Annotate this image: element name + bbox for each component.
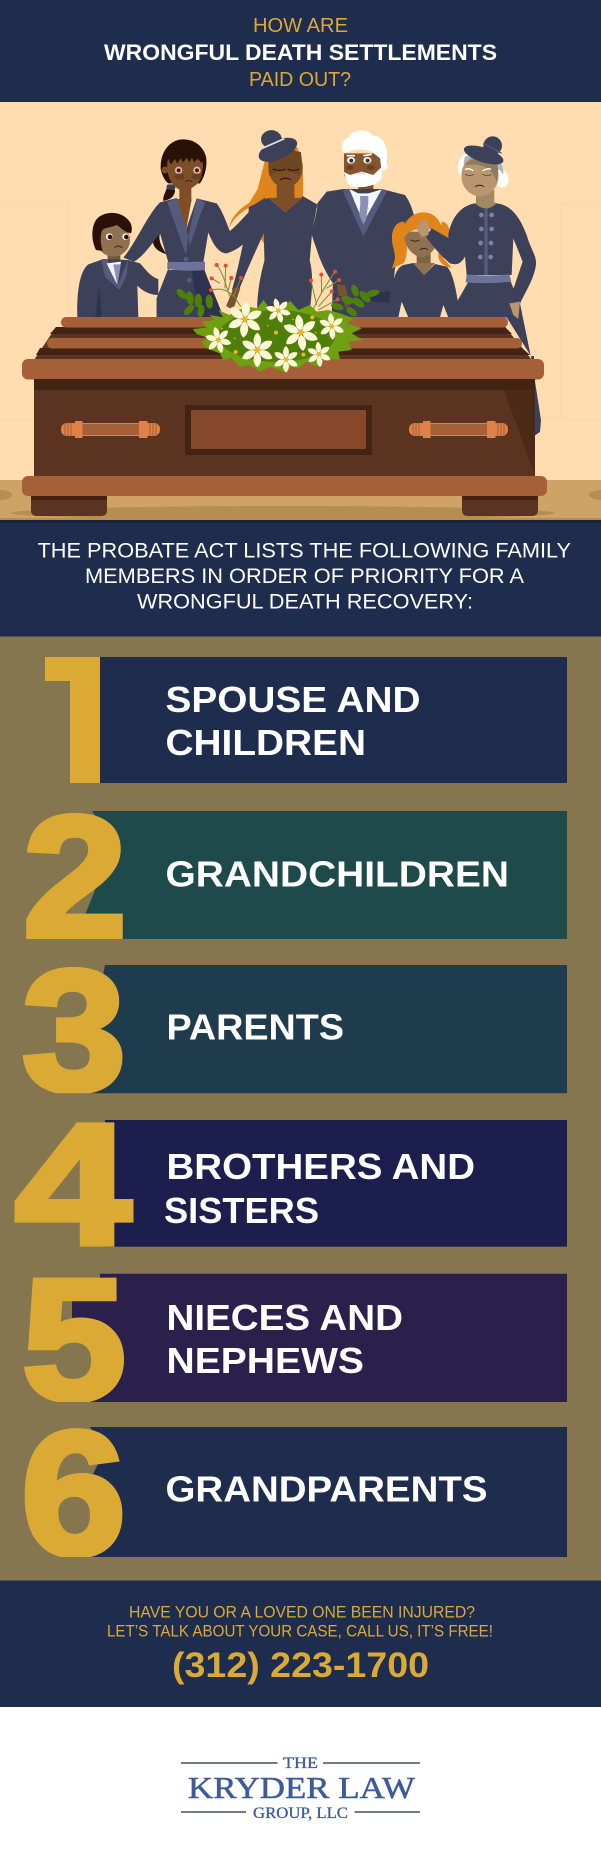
illustration: family mourning at a casket [0,102,601,520]
item 3: parents: 3 [22,935,126,1127]
intro text [38,538,571,614]
item 3: parents [22,965,567,1094]
priority list panel [0,625,601,1592]
item 5: nieces and nephews: NEPHEWS [166,1340,364,1381]
title line: paid out: PAID OUT? [249,69,351,91]
call to action band [0,1580,601,1707]
figure: woman with ponytail [123,139,267,317]
figure: grandfather [311,130,414,317]
berry branches [212,265,339,313]
leaves [175,284,380,318]
number 1 [45,657,100,783]
casket [22,317,547,516]
figure: grandmother [416,136,536,356]
call to action text [107,1604,493,1641]
header band [0,0,601,102]
intro text: MEMBERS IN ORDER OF PRIORITY FOR A [85,564,525,588]
item 2: grandchildren [26,811,567,939]
grandmother's skirt behind casket [531,356,541,436]
logo: The Kryder Law Group, LLC [181,1755,420,1822]
logo: The Kryder Law Group, LLC: KRYDER LAW [188,1770,416,1805]
intro text: WRONGFUL DEATH RECOVERY: [137,590,473,614]
casket: plaque [185,405,372,455]
item 6: grandparents: 6 [21,1396,126,1592]
casket: body [34,379,535,477]
call to action text: LET’S TALK ABOUT YOUR CASE, CALL US, IT’S FREE! [107,1623,493,1641]
casket: base and feet [31,490,107,516]
intro band [0,520,601,636]
intro text: THE PROBATE ACT LISTS THE FOLLOWING FAMILY [38,538,571,562]
wall panels [0,204,601,419]
item 1: spouse and children: SPOUSE AND [166,679,420,720]
logo: The Kryder Law Group, LLC: THE [283,1755,318,1772]
title line: wrongful death settlements: WRONGFUL DEATH SETTLEMENTS [104,40,497,65]
casket: right handle [409,421,508,438]
floor [0,480,601,520]
call to action text: HAVE YOU OR A LOVED ONE BEEN INJURED? [129,1604,475,1622]
item 2: grandchildren: GRANDCHILDREN [166,854,509,894]
item 5: nieces and nephews [24,1274,567,1402]
title line: how are: HOW ARE [253,15,348,37]
phone number: (312) 223-1700 [172,1646,429,1685]
item 2: grandchildren: 2 [23,781,127,973]
item 6: grandparents [24,1427,567,1557]
item 3: parents: PARENTS [166,1006,344,1048]
item 1: spouse and children [45,657,567,783]
item 5: nieces and nephews: 5 [22,1244,126,1436]
item 1: spouse and children: CHILDREN [166,722,366,763]
item 4: brothers and sisters: BROTHERS AND [166,1146,475,1187]
item 4: brothers and sisters: SISTERS [164,1190,319,1231]
bush [193,300,363,372]
number 1: 1 [40,625,104,817]
figure: woman with hat and long orange hair [226,130,350,318]
casket: lid tiers [34,327,532,360]
item 6: grandparents: GRANDPARENTS [166,1468,488,1510]
white flowers [202,295,346,373]
item 4: brothers and sisters [14,1120,567,1247]
figure: boy [77,213,158,317]
figure: girl [390,212,459,317]
item 5: nieces and nephews: NIECES AND [166,1297,403,1338]
casket: left handle [61,421,160,438]
flower arrangement [175,263,380,373]
yellow buds [221,315,316,357]
item 4: brothers and sisters: 4 [15,1089,131,1281]
logo: The Kryder Law Group, LLC: GROUP, LLC [253,1805,348,1822]
